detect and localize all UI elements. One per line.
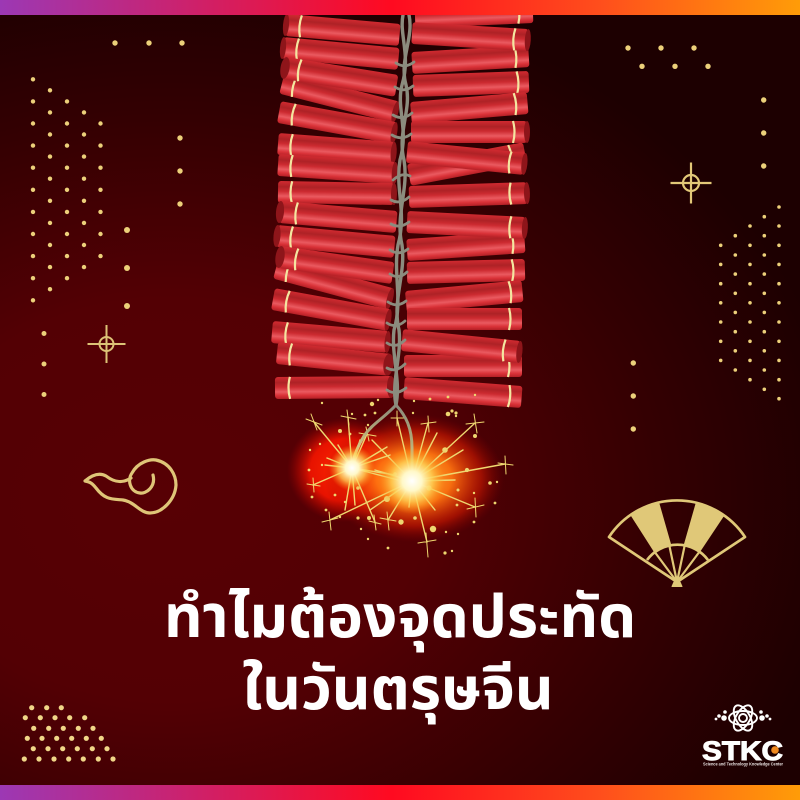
dot pattern: upper right [625, 45, 781, 432]
spark core left [329, 445, 375, 491]
fuse braid [387, 15, 414, 405]
icon: crosshair right [670, 162, 712, 204]
sparkler rays and stars [306, 410, 513, 557]
logo: STKC [702, 702, 783, 766]
left firecrackers [271, 14, 401, 399]
bottom gradient bar [0, 785, 800, 800]
right firecrackers [401, 1, 533, 408]
title: ทำไมต้องจุดประทัด [164, 583, 636, 653]
icon: cloud swirl [85, 460, 176, 513]
title [164, 583, 636, 725]
fuse fork: right branch [396, 405, 412, 480]
dot pattern: upper left [31, 40, 185, 397]
title: ในวันตรุษจีน [242, 655, 554, 725]
sparkler glow [287, 414, 504, 542]
top gradient bar [0, 0, 800, 15]
logo icon: atom [715, 702, 771, 734]
icon: crosshair left [88, 325, 126, 363]
logo: STKC: Science and Technology Knowledge Center [703, 762, 783, 766]
icon: folding fan [609, 500, 745, 586]
sparkler particles [308, 394, 498, 555]
dot pattern: lower left [22, 705, 116, 762]
spark core right [379, 448, 445, 514]
fuse fork: left branch [352, 405, 396, 466]
logo: STKC: STKC [702, 736, 783, 766]
